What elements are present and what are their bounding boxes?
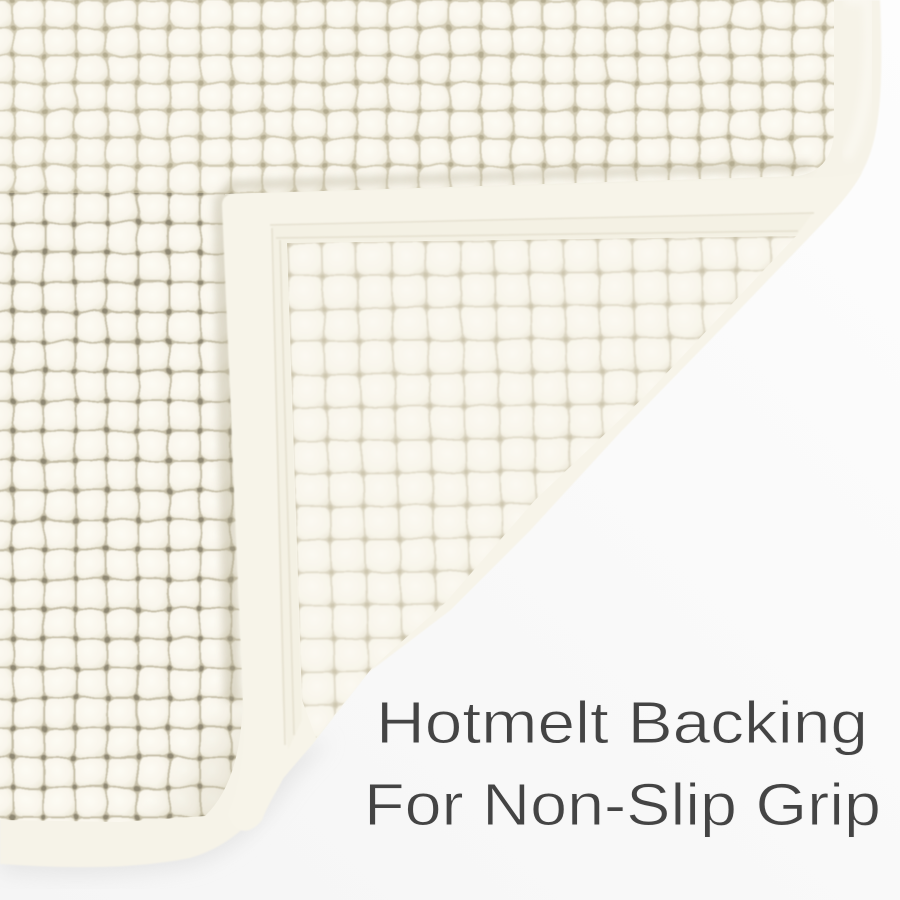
upper bubble rows [0, 0, 834, 193]
stitched band [272, 214, 812, 750]
caption line 2: For Non-Slip Grip [364, 772, 881, 838]
mat drop shadow [0, 740, 330, 875]
panel: folded-back flap [222, 172, 862, 831]
highlight on right border [845, 0, 869, 158]
caption line 1: Hotmelt Backing [376, 690, 868, 756]
stitch lines [270, 213, 814, 745]
flap border [222, 172, 862, 831]
shaded corner of bubbles [172, 701, 242, 818]
soft shadow cast by flap [213, 162, 810, 700]
lower bubble rows [0, 193, 250, 822]
caption [364, 690, 881, 838]
back bubble texture [287, 236, 796, 738]
